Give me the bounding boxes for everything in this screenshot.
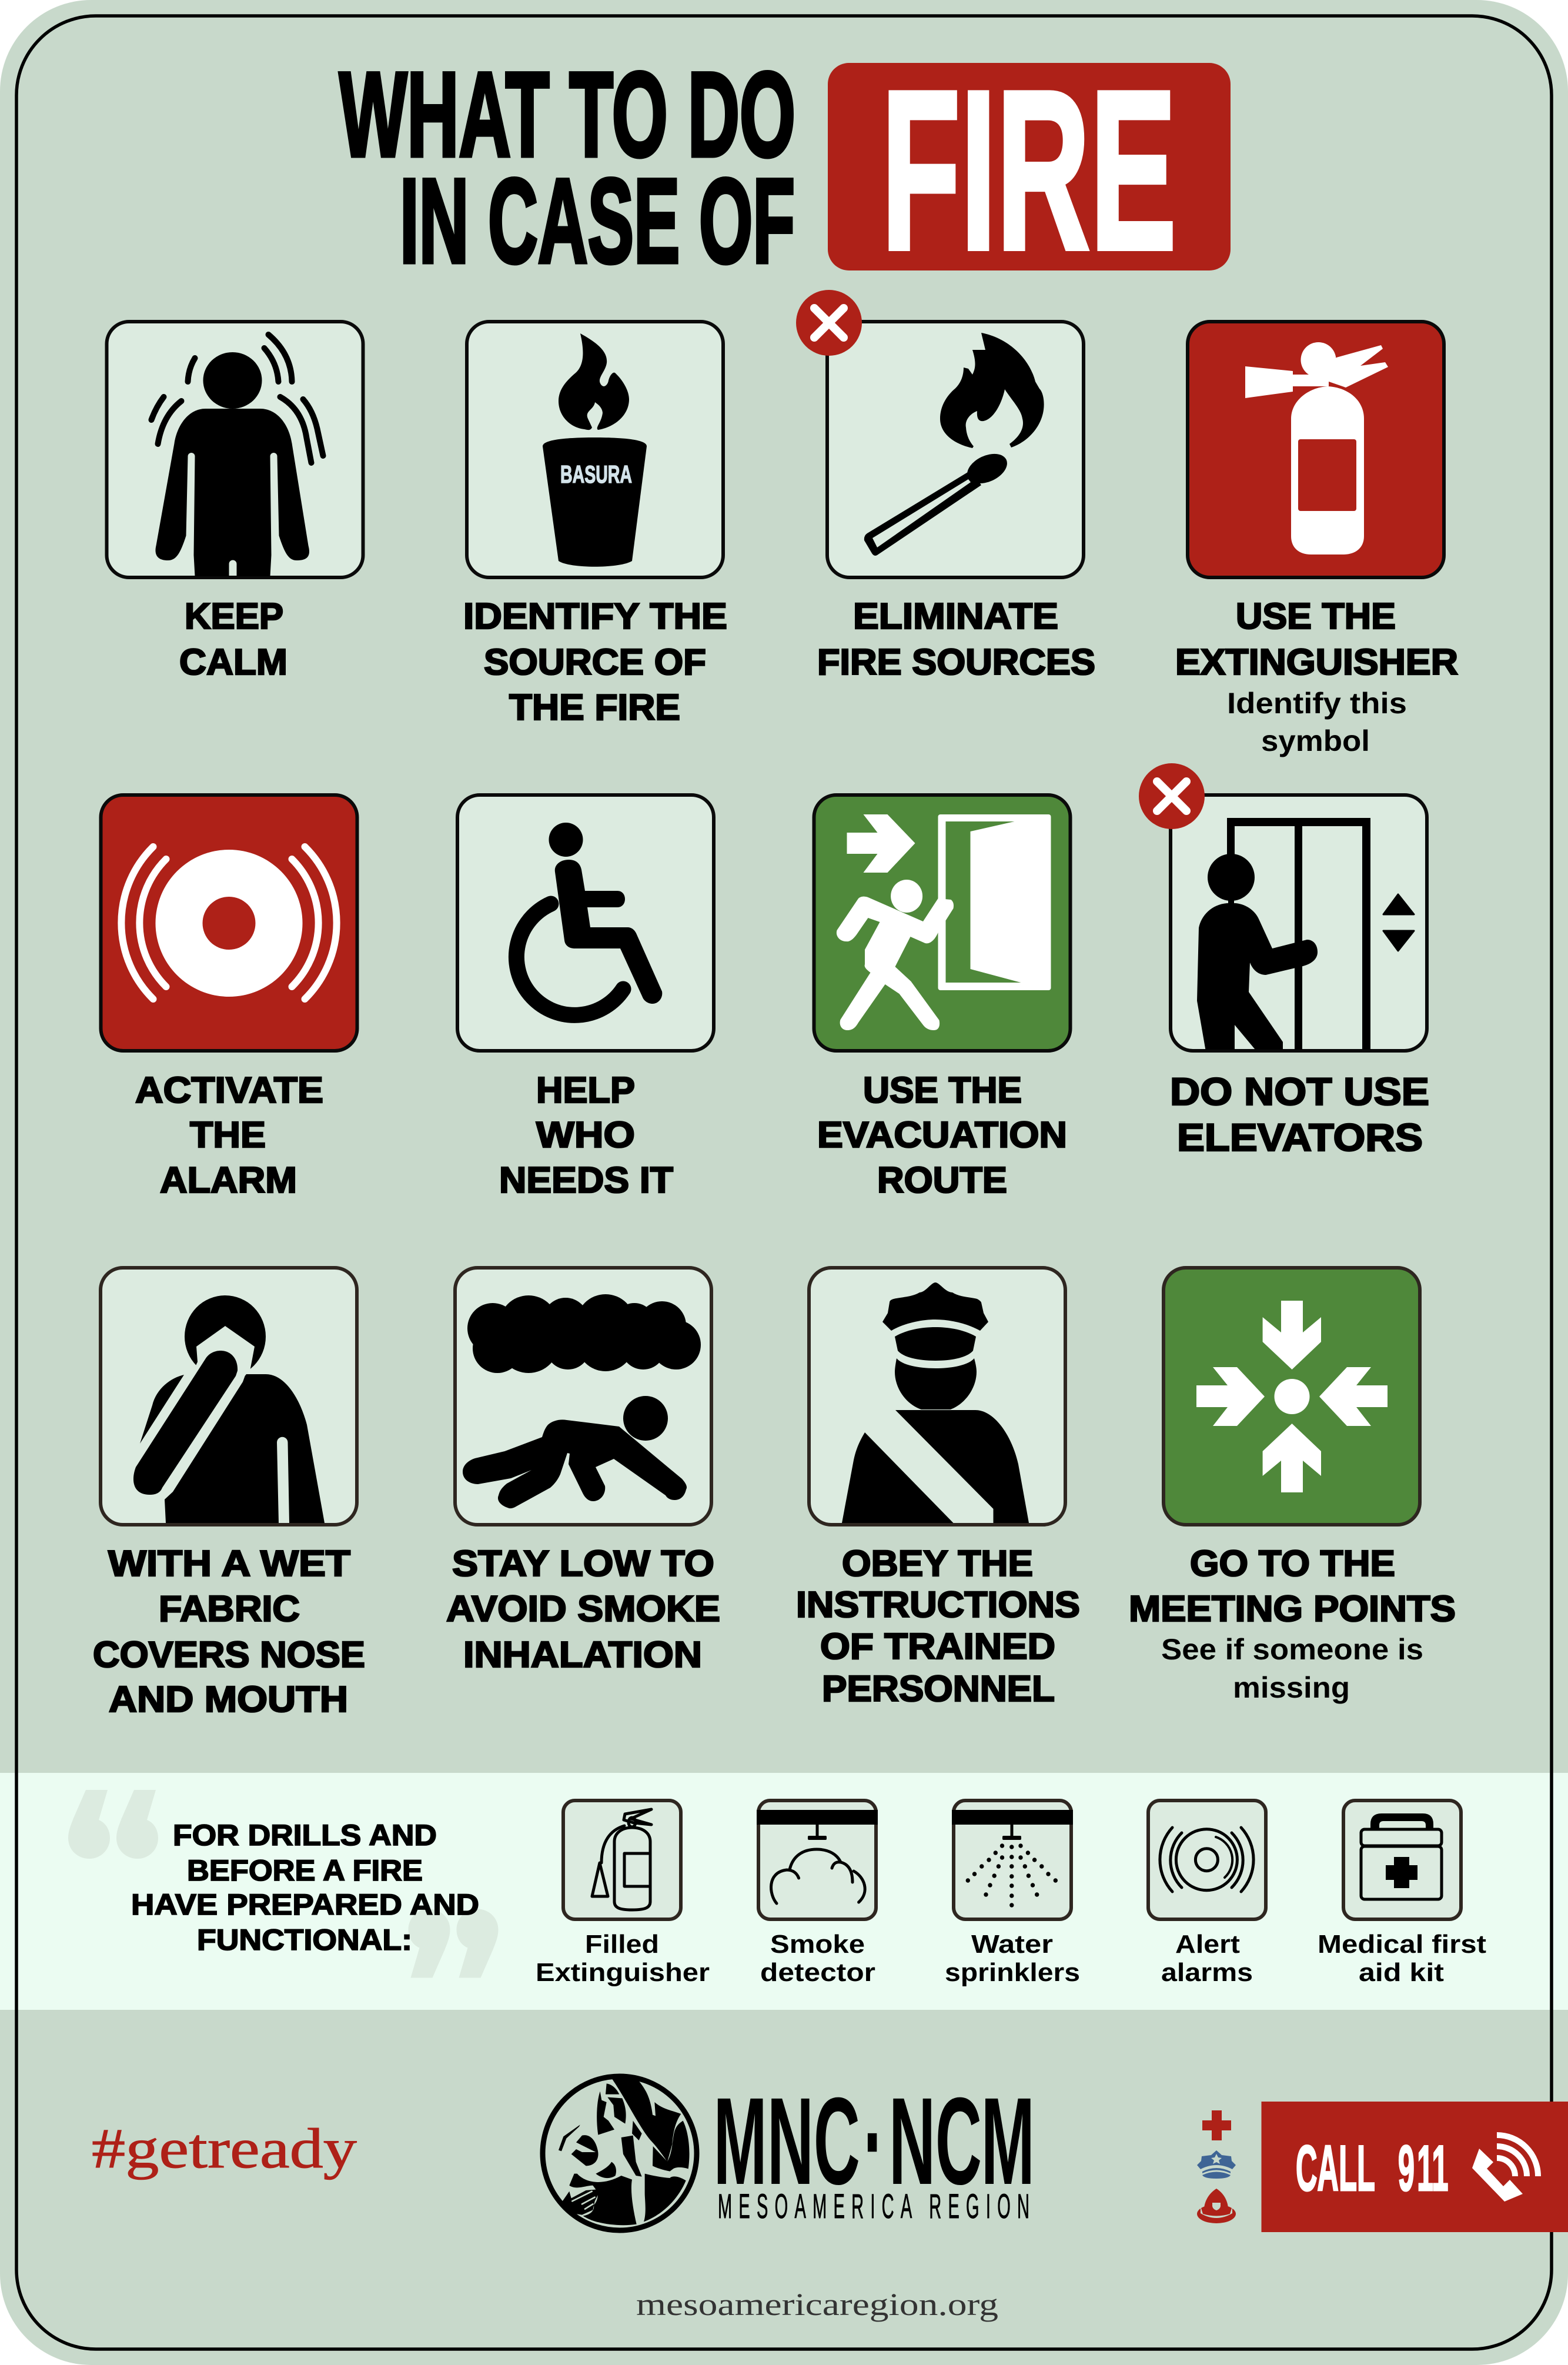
caption: sprinklers: [945, 1958, 1080, 1987]
label: wet fabric: AND MOUTH: [109, 1679, 348, 1720]
icon: smoke cloud: [467, 1294, 701, 1373]
panel: use evacuation route: [814, 795, 1070, 1201]
item: medical kit: [1318, 1801, 1486, 1987]
label: obey personnel: [796, 1544, 1080, 1709]
label: keep calm: CALM: [179, 642, 287, 683]
caption: Smoke: [770, 1930, 865, 1959]
icon: shaking person: [152, 335, 323, 576]
caption: Water: [971, 1930, 1053, 1959]
label: do not use elevators: DO NOT USE: [1170, 1070, 1429, 1113]
logo: emblem: [543, 2075, 697, 2230]
panel: activate the alarm: [101, 795, 357, 1201]
label: meeting points: [1129, 1544, 1456, 1704]
icon: emergency services: [1197, 2110, 1236, 2223]
label: eliminate fire sources: [817, 596, 1095, 683]
text: drills intro: BEFORE A FIRE: [187, 1854, 423, 1887]
label: meeting points: GO TO THE: [1190, 1544, 1395, 1584]
panel: obey personnel: [796, 1268, 1080, 1709]
title: IN CASE OF: [400, 154, 795, 288]
caption: alarms: [1161, 1958, 1253, 1987]
icon: wheelchair: [516, 823, 662, 1015]
caption: [536, 1930, 710, 1987]
label: activate the alarm: [135, 1070, 323, 1201]
label: use evacuation route: ROUTE: [877, 1160, 1007, 1201]
caption: Extinguisher: [536, 1958, 710, 1987]
panel: use the extinguisher: [1175, 322, 1458, 757]
icon: alarm: [121, 847, 337, 999]
icon: ceiling detector and smoke: [757, 1810, 878, 1903]
item: alert alarms: [1148, 1801, 1266, 1987]
text: drills intro: HAVE PREPARED AND: [131, 1888, 479, 1921]
label: stay low: [446, 1544, 720, 1675]
label: keep calm: KEEP: [185, 596, 283, 637]
caption: Filled: [585, 1930, 659, 1959]
strip background: drills: [0, 1773, 1568, 2010]
label: use the extinguisher: EXTINGUISHER: [1175, 642, 1458, 683]
label: stay low: AVOID SMOKE: [446, 1589, 720, 1629]
panel: meeting points: [1129, 1268, 1456, 1704]
label: activate the alarm: ALARM: [160, 1160, 297, 1201]
icon: officer: [842, 1282, 1029, 1523]
label: use evacuation route: EVACUATION: [817, 1115, 1067, 1155]
label: eliminate fire sources: FIRE SOURCES: [817, 642, 1095, 683]
item: smoke detector: [757, 1801, 878, 1987]
panel: keep calm: [107, 322, 363, 683]
panel: wet fabric: [93, 1268, 365, 1720]
label: meeting points: missing: [1233, 1671, 1350, 1704]
icon: exit door with runner: [837, 814, 1051, 1030]
icon: person covering face: [133, 1295, 325, 1523]
label: help who needs it: [499, 1070, 673, 1201]
caption: detector: [760, 1958, 875, 1987]
label: identify the source: IDENTIFY THE: [463, 596, 727, 637]
text: drills intro: [131, 1819, 479, 1956]
quote marks: [68, 1790, 499, 1978]
caption: Alert: [1175, 1930, 1240, 1959]
label: help who needs it: NEEDS IT: [499, 1160, 673, 1201]
icon: flame over trash bin: BASURA: [560, 460, 632, 488]
caption: [1318, 1930, 1486, 1987]
item: filled extinguisher: [536, 1801, 710, 1987]
title: WHAT TO DO: [339, 48, 795, 182]
label: activate the alarm: ACTIVATE: [135, 1070, 323, 1111]
label: use the extinguisher: symbol: [1261, 724, 1370, 757]
icon: alarm rings: [1160, 1828, 1253, 1892]
label: meeting points: MEETING POINTS: [1129, 1589, 1456, 1629]
caption: aid kit: [1359, 1958, 1444, 1987]
icon: phone: [1472, 2135, 1538, 2202]
caption: [945, 1930, 1080, 1987]
panel: do not use elevators: [1139, 763, 1429, 1159]
icon: prohibited badge: [796, 290, 862, 356]
icon: crawling person: [463, 1396, 687, 1508]
icon: extinguisher: [1245, 342, 1388, 554]
label: obey personnel: OBEY THE: [842, 1544, 1033, 1584]
label: activate the alarm: THE: [190, 1115, 266, 1155]
text: drills intro: FOR DRILLS AND: [173, 1819, 437, 1852]
hashtag: #getready: [92, 2117, 357, 2180]
label: do not use elevators: ELEVATORS: [1177, 1115, 1423, 1159]
label: obey personnel: OF TRAINED: [820, 1626, 1055, 1667]
panel: stay low: [446, 1268, 720, 1675]
title: [339, 44, 1231, 297]
icon: small extinguisher: [592, 1809, 651, 1910]
label: wet fabric: WITH A WET: [108, 1544, 350, 1584]
label: use evacuation route: USE THE: [863, 1070, 1022, 1111]
item: water sprinklers: [945, 1801, 1080, 1987]
icon: assembly point arrows: [1196, 1301, 1388, 1492]
panel: identify the source: [463, 322, 727, 728]
call 911 banner: CALL 911: [1296, 2132, 1449, 2204]
caption: Medical first: [1318, 1930, 1486, 1959]
label: do not use elevators: [1170, 1070, 1429, 1159]
icon: prohibited badge: [1139, 763, 1205, 829]
label: obey personnel: PERSONNEL: [822, 1669, 1055, 1709]
label: wet fabric: FABRIC: [159, 1589, 300, 1629]
text: drills intro: FUNCTIONAL:: [197, 1923, 412, 1956]
label: stay low: INHALATION: [463, 1635, 702, 1675]
icon: person at elevator: [1197, 818, 1414, 1050]
call 911 banner: [1262, 2102, 1568, 2232]
label: help who needs it: WHO: [536, 1115, 635, 1155]
label: use the extinguisher: [1175, 596, 1458, 757]
icon: flame over trash bin: [543, 333, 647, 567]
icon: sprinkler: [952, 1810, 1073, 1908]
title: FIRE: [881, 44, 1176, 297]
panel: eliminate fire sources: [796, 290, 1095, 683]
label: identify the source: [463, 596, 727, 728]
label: obey personnel: INSTRUCTIONS: [796, 1585, 1080, 1625]
label: keep calm: [179, 596, 287, 683]
logo: subtitle: MESOAMERICA REGION: [718, 2187, 1029, 2226]
logo: wordmark: MNC·NCM: [714, 2072, 1035, 2210]
label: stay low: STAY LOW TO: [452, 1544, 714, 1584]
caption: [760, 1930, 875, 1987]
label: help who needs it: HELP: [536, 1070, 635, 1111]
label: eliminate fire sources: ELIMINATE: [853, 596, 1058, 637]
icon: first aid kit: [1361, 1813, 1442, 1899]
label: identify the source: SOURCE OF: [484, 642, 706, 683]
label: use the extinguisher: USE THE: [1236, 596, 1396, 637]
label: wet fabric: COVERS NOSE: [93, 1635, 365, 1675]
icon: burning match: [864, 333, 1044, 556]
label: wet fabric: [93, 1544, 365, 1720]
label: use the extinguisher: Identify this: [1227, 687, 1407, 720]
label: use evacuation route: [817, 1070, 1067, 1201]
logo: [543, 2072, 1035, 2230]
label: identify the source: THE FIRE: [509, 687, 680, 728]
panel: help who needs it: [457, 795, 714, 1201]
caption: [1161, 1930, 1253, 1987]
website: mesoamericaregion.org: [636, 2287, 998, 2322]
label: meeting points: See if someone is: [1161, 1633, 1423, 1666]
title: fire badge: [828, 63, 1231, 270]
